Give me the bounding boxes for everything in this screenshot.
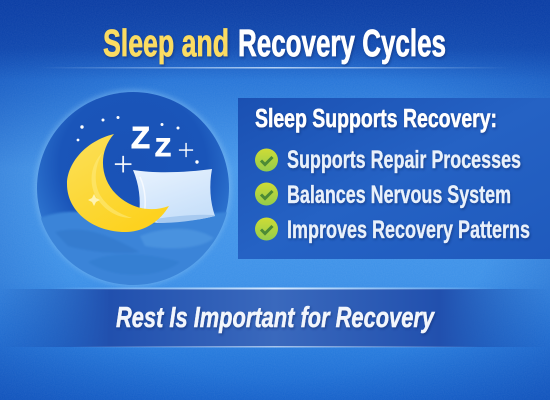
sleep letters: Z bbox=[155, 134, 171, 162]
icon: check 3 bbox=[255, 218, 278, 240]
sleep letters: Z bbox=[131, 120, 150, 155]
illustration: moon and pillow disc bbox=[30, 90, 240, 300]
sleep letters bbox=[131, 120, 171, 162]
stars bbox=[77, 116, 199, 172]
icon: check 1 bbox=[255, 148, 278, 172]
panel: sleep supports recovery bbox=[238, 98, 550, 259]
banner: rest is important bbox=[0, 288, 550, 348]
title: white part: Recovery Cycles bbox=[238, 23, 446, 65]
blanket folds bbox=[40, 210, 227, 285]
disc halo bbox=[35, 90, 231, 286]
icon: check 2 bbox=[255, 182, 278, 206]
icon: crescent moon bbox=[67, 134, 169, 232]
disc bbox=[37, 92, 229, 284]
icon: pillow bbox=[133, 169, 215, 223]
banner text: Rest Is Important for Recovery bbox=[116, 302, 435, 334]
title bbox=[103, 23, 446, 65]
title: yellow part: Sleep and bbox=[103, 23, 229, 65]
